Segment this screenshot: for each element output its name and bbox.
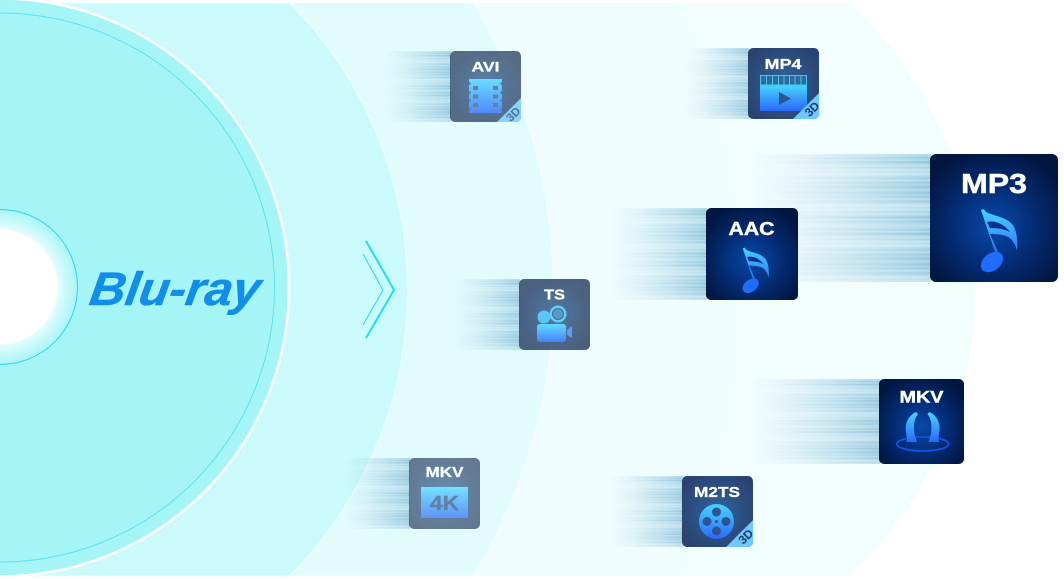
icon: AVI 3D: AVI xyxy=(472,58,500,74)
icon: M2TS 3D: M2TS xyxy=(694,484,740,501)
clapper video glyph xyxy=(760,76,807,111)
icon: TS xyxy=(519,279,590,350)
3D corner badge: 3D xyxy=(735,526,756,547)
3D corner badge: 3D xyxy=(504,105,523,124)
icon: MKV 4K: MKV xyxy=(426,464,464,481)
icon: MP3: MP3 xyxy=(961,168,1027,199)
icon: MKV: MKV xyxy=(900,388,944,406)
3D corner badge: 3D xyxy=(802,99,823,120)
icon: M2TS 3D xyxy=(682,476,756,547)
icon: MKV 4K xyxy=(409,458,480,529)
speed streak: MP4 xyxy=(693,48,749,119)
Blu-ray label: Blu-ray xyxy=(86,263,267,316)
speed streak: AVI xyxy=(394,51,451,122)
music note xyxy=(740,248,769,296)
speed streak: AAC xyxy=(622,208,707,300)
icon: MKV xyxy=(879,379,964,464)
arrow chevrons xyxy=(363,241,394,338)
speed streak: MKV 4K xyxy=(353,458,410,529)
icon: AVI 3D xyxy=(450,51,523,124)
icon: TS: TS xyxy=(544,288,565,304)
speed streak: M2TS xyxy=(619,476,683,547)
4K glyph: 4K xyxy=(430,493,460,515)
film reel glyph xyxy=(699,504,734,539)
film strip xyxy=(469,79,502,113)
icon: AAC: AAC xyxy=(728,219,774,239)
speed streak: TS xyxy=(464,279,520,350)
icon: AAC xyxy=(706,208,798,300)
surround glyph xyxy=(897,412,949,451)
icon: MP4 3D xyxy=(748,48,823,120)
icon: MP3 xyxy=(930,154,1058,282)
video camera glyph xyxy=(537,306,572,342)
icon: MP4 3D: MP4 xyxy=(764,56,802,73)
speed streak: MP3 xyxy=(772,154,931,282)
speed streak: MKV xyxy=(766,379,880,464)
Blu-ray disc xyxy=(0,0,289,576)
music note xyxy=(977,209,1017,276)
